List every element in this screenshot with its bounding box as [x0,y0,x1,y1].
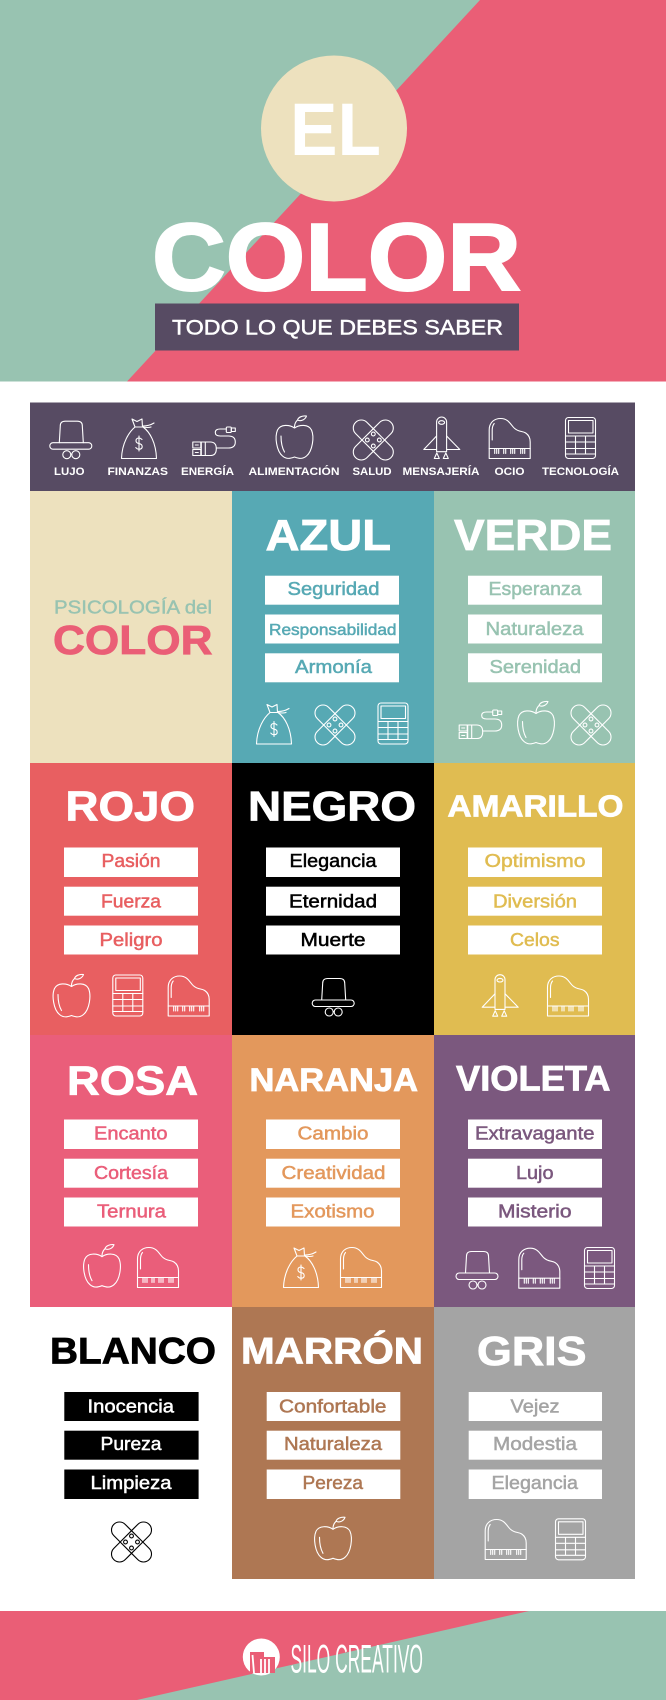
trait: Eternidad: Eternidad [289,892,377,912]
trait: Optimismo: Optimismo [484,851,586,871]
trait: Encanto [64,1120,198,1149]
trait: Diversión [468,887,602,916]
trait: Vejez: Vejez [510,1397,560,1417]
trait: Elegancia: Elegancia [290,851,377,871]
trait: Vejez [469,1392,602,1421]
trait: Pasión [64,848,198,877]
icon: money bag [284,1248,318,1288]
trait: Celos [468,926,602,954]
trait: Armonía [265,653,399,682]
trait: Seguridad [265,576,399,605]
trait: Esperanza: Esperanza [488,579,582,599]
icon: calculator [113,975,143,1016]
icon: calculator [556,1519,586,1560]
trait: Extravagante: Extravagante [475,1123,594,1143]
panel: violeta [434,1035,635,1307]
trait: Limpieza [64,1470,199,1499]
heading: GRIS: GRIS [477,1328,586,1374]
trait: Muerte [266,926,400,954]
trait: Modestia: Modestia [493,1434,578,1454]
heading: VIOLETA: VIOLETA [456,1060,610,1099]
label: TECNOLOGÍA: TECNOLOGÍA [542,465,619,478]
trait: Optimismo [468,848,602,877]
subtitle band: TODO LO QUE DEBES SABER [172,316,503,340]
trait: Exotismo [266,1198,400,1226]
icon: calculator [566,418,596,458]
icon: piano [138,1248,178,1288]
trait: Elegancia: Elegancia [492,1473,579,1493]
trait: Fuerza [64,887,198,916]
trait: Cambio [266,1120,400,1149]
text: PSICOLOGÍA del: PSICOLOGÍA del [54,596,212,617]
trait: Elegancia [266,848,400,877]
panel: negro [232,763,434,1035]
header background [0,0,666,382]
trait: Inocencia: Inocencia [88,1397,175,1417]
trait: Limpieza: Limpieza [90,1473,172,1493]
label: ALIMENTACIÓN: ALIMENTACIÓN [248,465,340,478]
text: COLOR: COLOR [53,617,212,663]
panel: gris [434,1307,635,1579]
icon: money bag [256,704,292,744]
icon: piano [519,1248,560,1288]
trait: Serenidad: Serenidad [490,657,581,677]
trait: Celos: Celos [510,930,560,950]
trait: Naturaleza [267,1431,400,1460]
trait: Extravagante [468,1120,602,1149]
heading: MARRÓN: MARRÓN [241,1330,423,1372]
trait: Peligro: Peligro [100,930,162,950]
trait: Armonía: Armonía [295,657,373,677]
panel: psicología del color [30,491,232,763]
trait: Diversión: Diversión [493,892,577,912]
panel: marrón [232,1307,434,1579]
trait: Esperanza [468,576,602,605]
panel: verde [434,491,635,763]
trait: Confortable [267,1392,400,1421]
trait: Naturaleza [468,614,602,644]
label: ENERGÍA: ENERGÍA [181,465,234,478]
trait: Pasión: Pasión [102,851,160,871]
heading: AZUL: AZUL [266,512,391,560]
icon: rocket [424,417,460,458]
icon: hat [50,421,92,459]
trait: Elegancia [469,1470,602,1499]
text: SILO CREATIVO [290,1638,423,1682]
trait: Seguridad: Seguridad [288,579,380,599]
label: SALUD: SALUD [352,466,392,478]
icon: calculator [584,1248,614,1288]
trait: Misterio [468,1198,602,1226]
icon: rocket [482,975,518,1016]
trait: Ternura [64,1198,198,1226]
icon: hat [456,1252,498,1289]
trait: Eternidad [266,887,400,916]
trait: Responsabilidad: Responsabilidad [269,622,396,639]
heading: BLANCO: BLANCO [50,1331,216,1372]
icon: apple [53,974,90,1017]
heading: ROJO: ROJO [66,782,195,830]
icon: apple [276,416,313,458]
icon: apple [84,1245,120,1287]
trait: Cortesía [64,1159,198,1188]
circle badge: EL [261,56,407,202]
panel: rojo [30,763,232,1035]
trait: Fuerza: Fuerza [101,892,162,912]
trait: Cortesía: Cortesía [94,1163,169,1183]
icon: plaster [315,705,355,745]
icon: silo creativo logo [243,1638,280,1676]
footer background [0,1611,666,1700]
trait: Responsabilidad [265,614,399,644]
trait: Pureza [64,1431,199,1460]
panel: rosa [30,1035,232,1307]
icon: plug [459,710,502,738]
heading: AMARILLO: AMARILLO [448,788,624,824]
label: LUJO: LUJO [54,466,85,478]
trait: Misterio: Misterio [498,1202,572,1222]
trait: Creatividad [266,1159,400,1188]
subtitle band [155,304,519,350]
icon: money bag [122,419,156,458]
icon: apple [518,701,554,744]
trait: Exotismo: Exotismo [290,1202,374,1222]
icon: calculator [378,703,408,744]
trait: Muerte: Muerte [300,930,366,950]
trait: Cambio: Cambio [298,1123,368,1143]
icon: piano [340,1248,382,1288]
heading: NEGRO: NEGRO [248,782,416,830]
trait: Creatividad: Creatividad [282,1163,386,1183]
circle badge: EL: EL [290,88,381,171]
trait: Modestia [469,1431,602,1460]
trait: Encanto: Encanto [94,1123,168,1143]
icon: piano [548,976,588,1016]
panel: blanco [30,1307,232,1579]
heading: ROSA: ROSA [67,1058,198,1104]
trait: Serenidad [468,653,602,682]
trait: Confortable: Confortable [279,1397,386,1417]
trait: Naturaleza: Naturaleza [486,619,584,639]
panel: azul [232,491,434,763]
trait: Pureza: Pureza [100,1434,162,1454]
label: MENSAJERÍA: MENSAJERÍA [402,465,480,478]
trait: Inocencia [64,1392,199,1421]
trait: Peligro [64,926,198,954]
trait: Ternura: Ternura [97,1202,167,1222]
trait: Pereza [267,1470,400,1499]
trait: Naturaleza: Naturaleza [284,1434,383,1454]
heading: VERDE: VERDE [454,512,612,560]
title: COLOR: COLOR [152,204,521,311]
panel: naranja [232,1035,434,1307]
trait: Lujo: Lujo [516,1163,554,1183]
icon: piano [485,1520,526,1560]
icon: plaster [353,420,393,460]
heading: NARANJA: NARANJA [250,1062,418,1098]
icon: piano [489,418,530,458]
label: OCIO: OCIO [494,466,525,478]
icon: piano [168,976,209,1016]
panel: amarillo [434,763,635,1035]
icon: apple [315,1517,351,1560]
trait: Pereza: Pereza [302,1473,364,1493]
icon: plaster [111,1522,152,1562]
panel: category legend [30,402,635,491]
label: FINANZAS: FINANZAS [108,466,168,478]
trait: Lujo [468,1159,602,1188]
icon: plaster [571,705,611,745]
icon: hat [312,978,354,1016]
icon: plug [193,427,235,456]
